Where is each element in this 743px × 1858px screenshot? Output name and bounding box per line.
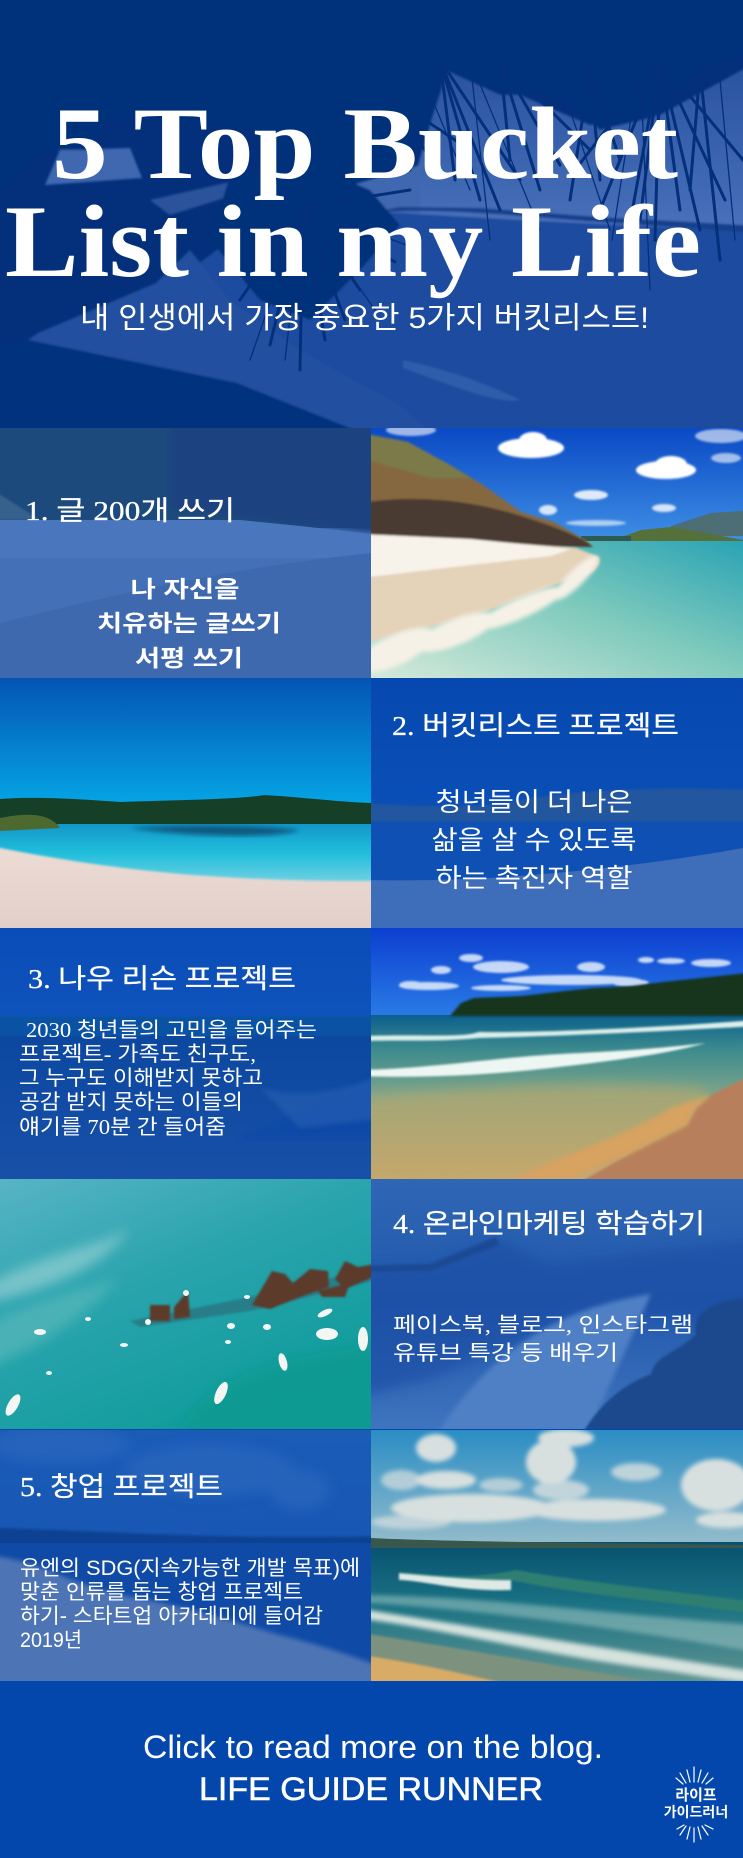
panel: item 1 text (0, 418, 385, 678)
item 3 heading: 3. 나우 리슨 프로젝트 (28, 964, 296, 994)
item 4 body: 유튜브 특강 등 배우기 (393, 1341, 618, 1365)
item 3 body: 2030 청년들의 고민을 들어주는 (26, 1018, 317, 1042)
item 4 background (371, 1179, 743, 1429)
item 3 background (0, 928, 371, 1179)
panel: footer (0, 1681, 743, 1858)
item 5 body: 하기- 스타트업 아카데미에 들어감 (20, 1605, 323, 1628)
title: List in my Life (5, 185, 701, 299)
item 3 body (19, 1018, 317, 1139)
item 4 body: 페이스북, 블로그, 인스타그램 (393, 1313, 693, 1337)
icon: life guide runner logo (664, 1767, 728, 1842)
panel: title banner (0, 0, 743, 440)
item 2 background (371, 784, 743, 928)
item 3 body: 그 누구도 이해받지 못하고 (19, 1066, 263, 1090)
item 4 body (393, 1313, 693, 1365)
icon: life guide runner logo: 라이프 (675, 1787, 717, 1804)
item 2 body: 삶을 살 수 있도록 (432, 826, 636, 855)
item 1 body (97, 576, 281, 671)
panel: item 2 text (361, 678, 743, 928)
item 1 body: 치유하는 글쓰기 (97, 610, 281, 636)
item 3 body: 공감 받지 못하는 이들의 (19, 1090, 243, 1114)
panel: item 3 text (0, 928, 385, 1179)
photo: white beach and hill (371, 428, 743, 678)
item 5 heading: 5. 창업 프로젝트 (20, 1472, 223, 1502)
item 1 body: 나 자신을 (130, 576, 240, 602)
item 3 body: 프로젝트- 가족도 친구도, (19, 1042, 256, 1066)
item 4 heading: 4. 온라인마케팅 학습하기 (393, 1209, 705, 1239)
item 3 body: 얘기를 70분 간 들어줌 (19, 1115, 226, 1139)
item 1 heading: 1. 글 200개 쓰기 (25, 496, 235, 526)
photo: lake with sand beach (0, 678, 371, 928)
photo: ocean waves and clouds (371, 1430, 743, 1681)
photo: headland and sea (371, 928, 743, 1179)
item 2 heading: 2. 버킷리스트 프로젝트 (392, 711, 679, 741)
footer background (0, 1681, 743, 1858)
item 5 body: 맞춘 인류를 돕는 창업 프로젝트 (20, 1581, 303, 1604)
item 1 background (0, 428, 371, 678)
title: 5 Top Bucket (52, 87, 678, 201)
item 5 body (20, 1557, 360, 1652)
item 2 body (432, 788, 636, 893)
item 2 body: 청년들이 더 나은 (436, 788, 632, 817)
panel: item 5 text (0, 1427, 385, 1700)
item 5 body: 2019년 (20, 1629, 82, 1652)
photo: aerial shipwreck and boats (0, 1179, 371, 1429)
title (5, 87, 701, 299)
call to action: Click to read more on the blog. (143, 1729, 603, 1765)
banner background: palm silhouette over beach (0, 0, 743, 428)
icon: life guide runner logo: 가이드러너 (664, 1804, 728, 1820)
item 1 body: 서평 쓰기 (135, 645, 243, 671)
item 2 body: 하는 촉진자 역할 (436, 864, 633, 893)
panel: item 4 text (351, 1179, 743, 1444)
subtitle: 내 인생에서 가장 중요한 5가지 버킷리스트! (80, 302, 649, 335)
item 5 background (0, 1430, 371, 1681)
blog name: LIFE GUIDE RUNNER (199, 1771, 543, 1807)
item 5 body: 유엔의 SDG(지속가능한 개발 목표)에 (20, 1557, 360, 1580)
